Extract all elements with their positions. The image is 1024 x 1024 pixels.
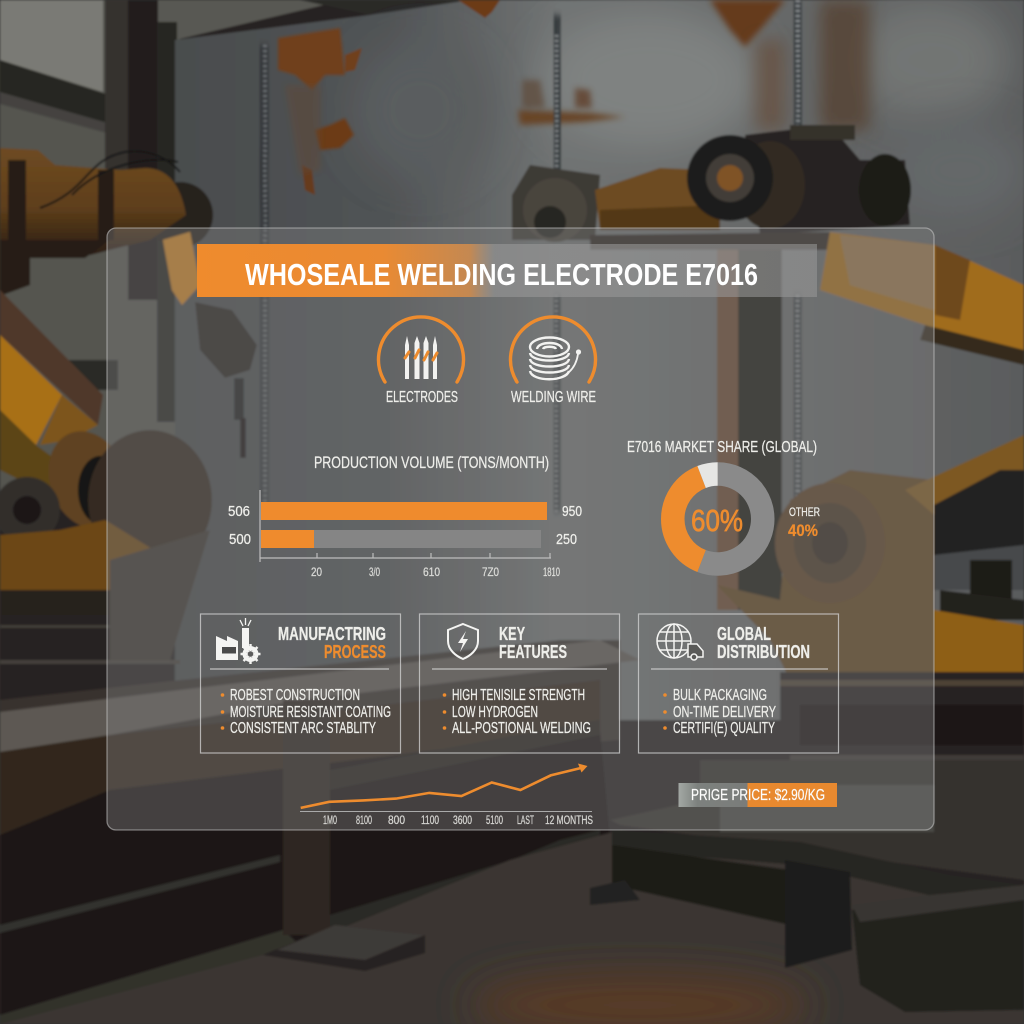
background: right machine base <box>590 672 1024 1012</box>
card list: ROBEST CONSTRUCTION <box>230 687 360 704</box>
card list <box>663 687 776 737</box>
title band <box>197 244 817 297</box>
icon: globe and truck <box>657 624 703 660</box>
axis tick labels: 3/0 <box>369 565 380 579</box>
donut value: 60% <box>691 503 743 538</box>
card heading <box>499 624 567 662</box>
background: corrugated building wall <box>0 0 470 500</box>
trend axis labels: 1M0 <box>323 815 337 827</box>
price tag: PRIGE PRICE: $2.90/KG <box>691 787 825 804</box>
card list: BULK PACKAGING <box>673 687 767 704</box>
card heading <box>717 624 810 662</box>
trend axis labels: LAST <box>517 815 534 827</box>
glass panel <box>107 228 934 830</box>
label: welding wire: WELDING WIRE <box>511 389 596 406</box>
icon: welding wire coil <box>510 317 596 382</box>
axis tick labels: 610 <box>423 565 440 579</box>
line chart: price trend <box>300 764 593 827</box>
chart heading: PRODUCTION VOLUME (TONS/MONTH) <box>314 454 549 472</box>
card: global distribution <box>638 614 838 753</box>
trend axis labels: 5100 <box>486 815 503 827</box>
card heading: PROCESS <box>324 642 386 662</box>
trend axis labels: 3600 <box>453 815 472 827</box>
bar chart: production volume <box>228 454 582 579</box>
trend axis labels: 1100 <box>421 815 439 827</box>
trend axis <box>300 810 592 812</box>
background: floor plate and beams <box>0 640 640 1024</box>
card: key features <box>420 614 620 753</box>
value labels: 250 <box>556 531 577 548</box>
card list: CERTIFI(E) QUALITY <box>673 720 775 737</box>
background: weld seams <box>261 0 800 512</box>
axes <box>260 490 551 562</box>
card heading: MANUFACTRING <box>278 624 386 644</box>
donut segments <box>673 474 763 564</box>
background: steel plate wall <box>175 0 1024 720</box>
background: left robot arm <box>0 148 257 690</box>
background: right yellow arm and lower joint <box>717 232 1024 680</box>
trend axis labels: 8100 <box>356 815 372 827</box>
donut heading: E7016 MARKET SHARE (GLOBAL) <box>627 439 817 456</box>
label: electrodes: ELECTRODES <box>386 389 458 406</box>
card list <box>443 687 591 737</box>
trend line with arrow <box>301 764 588 808</box>
donut chart: market share <box>627 439 820 564</box>
value labels <box>228 503 582 548</box>
trend axis labels: 12 MONTHS <box>545 815 593 827</box>
icon: factory and gear <box>216 618 260 664</box>
card heading: DISTRIBUTION <box>717 642 810 662</box>
axis tick labels: 1810 <box>543 565 560 579</box>
value labels: 950 <box>562 503 582 520</box>
card list: LOW HYDROGEN <box>452 704 538 721</box>
background: right robot head <box>512 125 911 250</box>
value labels: 506 <box>228 503 250 520</box>
card list: HIGH TENISILE STRENGTH <box>452 687 585 704</box>
value labels: 500 <box>229 531 251 548</box>
trend axis labels: 800 <box>388 815 405 827</box>
price tag <box>678 783 837 807</box>
background: concrete floor <box>0 830 1024 1024</box>
card heading: KEY <box>499 624 525 644</box>
card list: MOISTURE RESISTANT COATING <box>230 704 391 721</box>
background: right vertical column <box>717 240 782 610</box>
bars <box>261 502 547 548</box>
card list: CONSISTENT ARC STABLITY <box>230 720 376 737</box>
card list <box>221 687 391 737</box>
card heading: FEATURES <box>499 642 567 662</box>
card list: ALL-POSTIONAL WELDING <box>452 720 591 737</box>
donut legend: 40% <box>788 521 818 540</box>
background: rust patches <box>278 0 870 195</box>
donut legend <box>788 505 820 540</box>
background: vertical post and foot plate <box>263 700 425 971</box>
card heading: GLOBAL <box>717 624 771 644</box>
card: manufacturing process <box>200 614 400 753</box>
icon: electrodes <box>378 317 463 382</box>
axis tick labels: 7Z0 <box>482 565 499 579</box>
axis tick labels: 20 <box>311 565 322 579</box>
title band: WHOSEALE WELDING ELECTRODE E7016 <box>245 257 758 292</box>
card heading <box>278 624 386 662</box>
axis tick labels <box>311 565 560 579</box>
card list: ON-TIME DELIVERY <box>673 704 776 721</box>
trend axis labels <box>323 815 593 827</box>
icon: shield with bolt <box>448 624 478 659</box>
donut legend: OTHER <box>789 505 820 519</box>
